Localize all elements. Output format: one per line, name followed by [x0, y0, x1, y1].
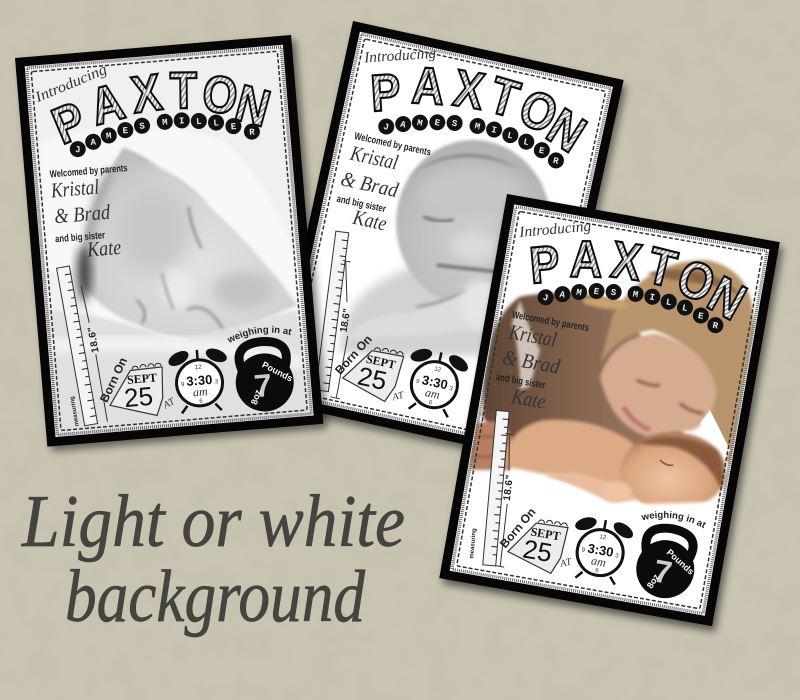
- card 2 James Miller beads: M: [474, 121, 481, 132]
- card 1 born-on calendar: 25: [123, 381, 154, 413]
- caption: Light or white background: [21, 481, 405, 638]
- card 3 length line and value: [482, 433, 527, 567]
- card 1 name PAXTON: T: [169, 62, 198, 120]
- card 3 name PAXTON: O: [669, 248, 723, 315]
- card 1 James Miller beads: J: [75, 145, 81, 155]
- card 3 name PAXTON: A: [569, 231, 603, 289]
- card 2 shadow: [273, 27, 626, 467]
- card 2 alarm clock: 3:30: [421, 372, 449, 392]
- card 1 name PAXTON: [42, 54, 280, 157]
- card 3: mother and baby colour photo, right: [438, 194, 788, 636]
- card 2 alarm clock: [397, 343, 473, 420]
- card 2 James Miller beads: J: [382, 122, 390, 133]
- card 1 James Miller beads: [67, 106, 261, 158]
- card 1 introducing: Introducing: [32, 62, 110, 106]
- card 1 James Miller beads: L: [196, 117, 202, 127]
- card 3 James Miller beads: M: [575, 288, 582, 298]
- card 2 name PAXTON: [357, 39, 601, 169]
- card 1 alarm clock: 12: [195, 365, 203, 371]
- card 3 James Miller beads: L: [681, 303, 688, 314]
- card 1 James Miller beads: M: [162, 118, 168, 128]
- card 2 James Miller beads: M: [416, 118, 423, 129]
- caption: Light or white background: background: [65, 556, 366, 638]
- card 2 name PAXTON: P: [369, 63, 402, 123]
- card 3 James Miller beads: R: [712, 321, 719, 332]
- card 3 parents text: Kate: [509, 384, 548, 414]
- card 3 born-on calendar: 25: [521, 533, 554, 568]
- card 2 James Miller beads: S: [451, 119, 459, 130]
- card 1 James Miller beads: E: [230, 122, 237, 132]
- card 2 James Miller beads: [377, 97, 569, 173]
- card 3 parents text: [491, 309, 590, 419]
- caption: Light or white background: Light or white: [21, 481, 405, 563]
- card 1 ruler: [57, 266, 98, 426]
- card 2 alarm clock: 9: [415, 379, 420, 385]
- card 3 scalloped border: [457, 211, 762, 609]
- card 2 frame: [270, 21, 624, 461]
- card 1 name PAXTON: P: [44, 91, 94, 156]
- card 2 ruler: [316, 231, 349, 392]
- card 2 James Miller beads: E: [433, 118, 441, 129]
- card 3 alarm clock: [564, 512, 637, 587]
- card 1 photo: [46, 147, 312, 436]
- card 1 scalloped border: [31, 51, 307, 430]
- card 1 born-on calendar: Born On: [97, 355, 130, 405]
- card 3 alarm clock: am: [590, 553, 607, 570]
- card 1 length line and value: 18.6": [86, 326, 102, 353]
- card 3 born-on calendar: [493, 501, 571, 575]
- card 3 kettlebell: [632, 524, 702, 603]
- card 3 James Miller beads: M: [632, 289, 639, 300]
- card 1 measuring label: measuring: [70, 395, 81, 427]
- card 3 kettlebell: Pounds: [665, 547, 696, 577]
- card 3 James Miller beads: A: [559, 290, 566, 301]
- card 1 at flourish: AT: [161, 395, 178, 412]
- card 3 photo: [468, 258, 756, 506]
- card 2 parents text: Kristal: [348, 141, 401, 175]
- card 3 James Miller beads: E: [593, 287, 600, 297]
- card 1 kettlebell: Pounds: [260, 360, 294, 384]
- card 3 name PAXTON: [517, 215, 760, 335]
- card 2 length line and value: 18.6": [339, 308, 353, 333]
- card 3 parents text: & Brad: [501, 345, 562, 379]
- card 1 name PAXTON: X: [128, 63, 165, 125]
- card 2 alarm clock: 12: [434, 366, 442, 374]
- card 1 James Miller beads: M: [106, 131, 112, 142]
- card 3 born-on calendar: Born On: [497, 505, 539, 551]
- card 2 James Miller beads: R: [552, 156, 560, 167]
- card 3 name PAXTON: P: [527, 235, 562, 295]
- card 2 parents text: & Brad: [339, 166, 401, 202]
- card 2 James Miller beads: E: [538, 146, 546, 157]
- card 2 James Miller beads: L: [506, 131, 514, 142]
- card 1 parents text: Welcomed by parents: [49, 163, 128, 181]
- card 3 name PAXTON: X: [608, 231, 645, 292]
- card 3 born-on calendar: SEPT: [530, 524, 562, 543]
- card 3 alarm clock: 3: [615, 553, 620, 560]
- card 3 alarm clock: 12: [599, 534, 607, 541]
- card 1 name PAXTON: N: [229, 74, 276, 139]
- card 2 alarm clock: 3: [449, 386, 454, 393]
- card 2 alarm clock: 6: [428, 400, 433, 407]
- card 1 kettlebell: 8oz: [249, 388, 263, 406]
- card 1 James Miller beads: L: [213, 118, 219, 129]
- card 1 halftone border: [27, 47, 311, 435]
- card 1 weighing in at: weighing in at: [227, 326, 292, 342]
- card 1 name PAXTON: A: [84, 73, 130, 137]
- card 2 name PAXTON: T: [483, 66, 526, 130]
- card 3 James Miller beads: [536, 269, 728, 336]
- card 1 kettlebell: 7: [253, 367, 273, 404]
- card 3 parents text: Kristal: [506, 320, 559, 352]
- card 3 frame: [439, 194, 780, 626]
- card 2: newborn close-up, centre: [307, 21, 630, 454]
- card 1 James Miller beads: I: [179, 116, 185, 127]
- card 3 James Miller beads: E: [697, 311, 705, 322]
- card 3 name PAXTON: T: [641, 236, 682, 299]
- card 1 parents text: & Brad: [53, 200, 111, 228]
- card 3 parents text: and big sister: [495, 372, 546, 391]
- card 3 measuring label: measuring: [469, 528, 478, 559]
- card 1 parents text: [49, 163, 135, 264]
- card 2 James Miller beads: I: [490, 125, 498, 136]
- card 3 kettlebell: 7: [651, 553, 675, 591]
- card 3 James Miller beads: L: [665, 297, 672, 308]
- card 3 kettlebell: 8oz: [645, 572, 661, 590]
- card 2 born-on calendar: Born On: [332, 332, 375, 377]
- card 1 length line and value: [81, 284, 107, 423]
- card 1 alarm clock: 3:30: [186, 372, 213, 389]
- card 1 alarm clock: 9: [181, 382, 185, 388]
- card 2 length line and value: [314, 260, 369, 399]
- card 1 James Miller beads: E: [122, 126, 129, 136]
- card 2 name PAXTON: O: [511, 78, 566, 145]
- card 1 print layout: [26, 46, 313, 436]
- card 1 alarm clock: [165, 344, 233, 414]
- card 3 introducing: Introducing: [518, 219, 592, 241]
- card 3 James Miller beads: J: [542, 293, 549, 304]
- card 1 name PAXTON: O: [200, 65, 241, 126]
- card 1 parents text: and big sister: [55, 230, 106, 245]
- card 2 name PAXTON: N: [537, 98, 595, 164]
- card 2 parents text: [331, 130, 432, 242]
- card 2 scalloped border: [288, 39, 606, 443]
- card 3 at flourish: AT: [558, 556, 574, 570]
- card 2 introducing: Introducing: [363, 46, 437, 66]
- card 2 born-on calendar: SEPT: [365, 352, 397, 372]
- card 1 alarm clock: 6: [199, 399, 204, 405]
- card 1 parents text: Kristal: [49, 175, 100, 202]
- card 2 born-on calendar: [327, 327, 407, 403]
- card 2 James Miller beads: A: [399, 120, 407, 131]
- card 3 James Miller beads: S: [610, 288, 618, 298]
- card 2 parents text: Kate: [350, 205, 389, 236]
- card 2 photo: [336, 138, 550, 360]
- card 2 at flourish: AT: [390, 390, 406, 403]
- card 1 James Miller beads: R: [249, 127, 256, 138]
- card 1 born-on calendar: SEPT: [126, 370, 158, 387]
- card 3 parents text: Welcomed by parents: [511, 310, 590, 334]
- card 3 alarm clock: 9: [581, 547, 586, 554]
- card 3 name PAXTON: N: [699, 265, 755, 332]
- card 1 alarm clock: am: [192, 384, 208, 399]
- card 3 shadow: [442, 200, 783, 632]
- card 1 alarm clock: 3: [215, 379, 219, 386]
- card 3 alarm clock: 6: [595, 568, 600, 575]
- card 2 print layout: [283, 30, 612, 448]
- card 3 ruler: [483, 410, 509, 566]
- card 2 name PAXTON: X: [450, 59, 488, 121]
- card 1 frame: [15, 35, 323, 447]
- card 1 James Miller beads: A: [90, 138, 97, 148]
- card 1 kettlebell: [232, 339, 297, 414]
- card 3 weighing in at: weighing in at: [641, 510, 706, 528]
- card 1 shadow: [19, 40, 328, 451]
- card 1: sleeping baby in hood, left: [14, 35, 332, 456]
- card 1 born-on calendar: [94, 352, 166, 420]
- card 2 parents text: Welcomed by parents: [353, 131, 432, 159]
- card 2 alarm clock: am: [424, 385, 441, 402]
- card 3 print layout: [450, 205, 768, 615]
- card 1 James Miller beads: S: [139, 121, 146, 132]
- card 2 parents text: and big sister: [336, 194, 387, 215]
- card 2 name PAXTON: A: [410, 57, 446, 116]
- card 3 alarm clock: 3:30: [586, 541, 615, 560]
- card 2 halftone border: [283, 34, 611, 448]
- card 1 parents text: Kate: [85, 235, 122, 262]
- card 3 halftone border: [452, 207, 767, 613]
- card 3 length line and value: 18.6": [502, 474, 516, 502]
- card 3 James Miller beads: I: [649, 292, 656, 303]
- card 2 born-on calendar: 25: [355, 361, 390, 396]
- card 2 James Miller beads: L: [522, 137, 530, 148]
